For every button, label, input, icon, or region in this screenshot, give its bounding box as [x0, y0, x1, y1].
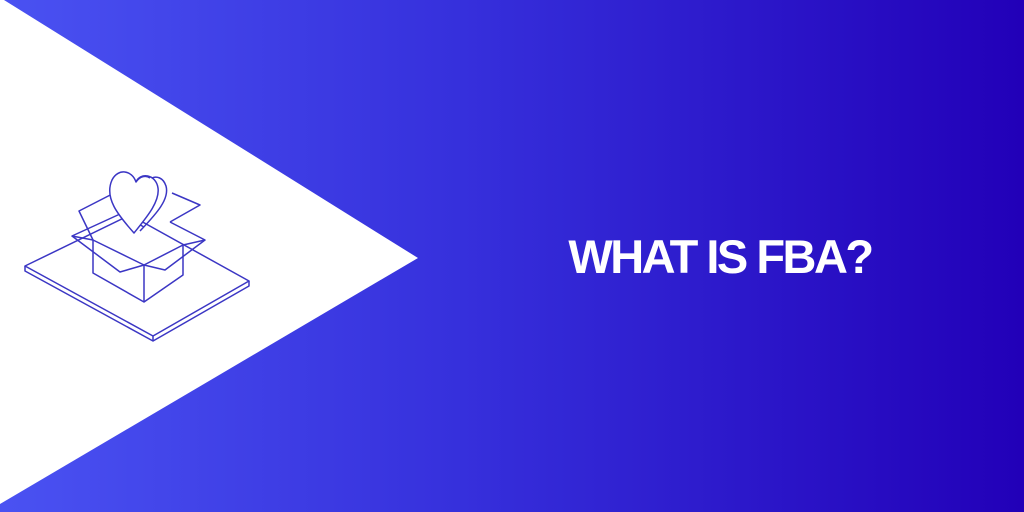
title: WHAT IS FBA?: [568, 230, 872, 283]
platform: [25, 215, 249, 336]
heart: [110, 172, 158, 233]
box: [93, 240, 183, 302]
flaps: [72, 214, 144, 240]
icon: open box with heart: [24, 171, 250, 342]
